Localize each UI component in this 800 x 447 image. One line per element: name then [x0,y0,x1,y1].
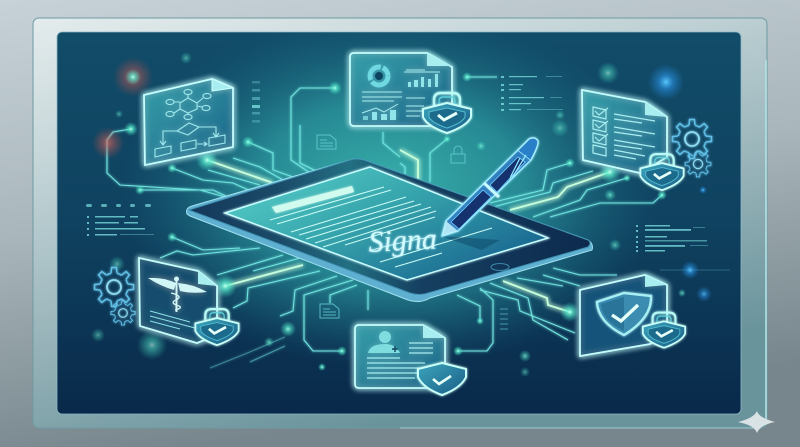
lock: medical record [195,309,239,345]
signature: Signa [368,222,438,259]
lock: security document [643,313,685,348]
gears: checklist [672,120,712,177]
tablet body [189,159,590,294]
sparkle watermark [738,411,775,433]
small data bars [86,76,708,330]
document: flowchart [144,79,233,165]
tablet screen [225,167,548,280]
dark display panel [57,32,741,414]
tablet home button [491,264,509,270]
shield: personnel ID [418,363,466,395]
pen [442,138,538,236]
document heading bar [272,186,354,213]
pen shadow [440,236,500,250]
document: analytics report [350,53,452,126]
gears: medical record [94,268,135,325]
bright circuit traces [207,150,610,312]
small outline icons [317,135,465,318]
document: medical record [139,258,217,343]
document: checklist [582,90,667,173]
lock: checklist [640,154,684,190]
shield: security document [597,293,651,335]
ambient glow lights [91,52,730,377]
lock: analytics report [423,93,471,133]
document text lines [270,187,492,267]
tablet [187,159,593,302]
document: security shield [580,275,667,356]
document: personnel ID [355,325,445,388]
tablet edge [187,159,593,302]
circuit lines [107,77,662,368]
